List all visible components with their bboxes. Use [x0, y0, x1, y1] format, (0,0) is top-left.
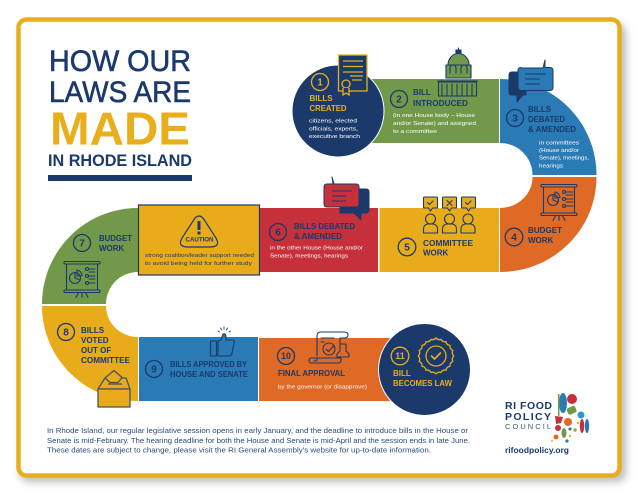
icon: capitol: [438, 48, 478, 96]
caution text: to avoid being held for further study: [145, 261, 252, 267]
icon: caution triangle: CAUTION: [186, 236, 214, 244]
description: [539, 140, 589, 170]
title: [48, 45, 192, 181]
number 1: 1: [317, 78, 323, 88]
number 3: 3: [512, 114, 518, 124]
description: Senate), meetings,: [539, 156, 589, 162]
heading: BILL: [393, 369, 411, 378]
step 2: bill introduced: [370, 48, 499, 143]
step 1: bills created: [292, 55, 384, 157]
number 9: 9: [151, 364, 157, 376]
heading: HOUSE AND SENATE: [170, 370, 249, 379]
icon: ballot box: [98, 370, 130, 407]
description: executive branch: [309, 134, 360, 140]
caution text: strong coalition/leader support needed: [145, 253, 254, 259]
step 4: budget work: [500, 177, 596, 272]
number 11: 11: [395, 351, 405, 361]
heading: OUT OF: [81, 346, 111, 355]
icon: certificate: [338, 55, 367, 95]
title: IN RHODE ISLAND: [48, 152, 192, 170]
heading: WORK: [99, 244, 125, 253]
logo wordmark: COUNCIL: [505, 422, 551, 431]
step 9: bills approved: [139, 327, 258, 401]
title: MADE: [50, 102, 190, 154]
heading: CREATED: [310, 104, 347, 113]
heading: BILLS: [81, 326, 105, 335]
description: and/or Senate) and assigned: [393, 121, 476, 127]
step 6: bills debated and amended: [259, 177, 378, 272]
heading: [528, 105, 576, 134]
description: (House and/or: [539, 148, 579, 154]
heading: BILL: [413, 88, 431, 97]
footer note: These dates are subject to change, please visit the RI General Assembly's website for up-to-date information.: [47, 446, 431, 454]
number 2: 2: [396, 94, 402, 106]
icon: presentation board: [64, 262, 100, 298]
heading: WORK: [528, 236, 554, 245]
logo map of food shapes: [551, 393, 589, 443]
footer note: In Rhode Island, our regular legislative session opens in early January, and the deadline to introduce bills in the House or: [47, 426, 469, 435]
icon: thumbs up: [210, 327, 234, 356]
step 7: budget work: [42, 208, 138, 304]
website: rifoodpolicy.org: [505, 446, 569, 455]
description: [309, 118, 360, 140]
icon: scroll and stamp: [309, 332, 349, 363]
step 8: bills voted out of committee: [42, 306, 138, 407]
icon: three voters: [424, 197, 476, 233]
heading: FINAL APPROVAL: [278, 369, 345, 378]
heading: INTRODUCED: [413, 99, 468, 108]
heading: & AMENDED: [294, 232, 342, 241]
description: Senate), meetings, hearings: [270, 254, 348, 260]
heading: VOTED: [81, 336, 109, 345]
heading: [170, 360, 249, 379]
heading: BUDGET: [528, 226, 562, 235]
description: officials, experts,: [309, 126, 358, 132]
description: hearings: [539, 164, 563, 170]
icon: chat bubbles: [509, 60, 553, 102]
logo wordmark: RI FOOD: [505, 400, 552, 412]
description: by the governor (or disapprove): [278, 384, 367, 390]
description: in the other House (House and/or: [270, 246, 363, 252]
description: [270, 246, 363, 260]
step 10: final approval: [259, 332, 399, 401]
footer note: Senate is mid-February. The hearing deadline for both the House and Senate is mid-April and the session ends in late June.: [47, 436, 470, 445]
description: citizens, elected: [309, 118, 357, 124]
logo wordmark: [505, 400, 552, 431]
heading: [413, 88, 468, 108]
icon: chat bubbles: [324, 177, 369, 220]
description: to a committee: [393, 129, 437, 135]
step 11: bill becomes law: [378, 324, 470, 416]
number 6: 6: [275, 228, 281, 238]
description: (in one House body – House: [393, 113, 475, 119]
number 4: 4: [511, 232, 517, 244]
step 3: bills debated and amended: [500, 60, 596, 175]
footer note: [47, 426, 470, 454]
heading: [99, 234, 132, 253]
caution box: [138, 205, 260, 275]
heading: [294, 222, 355, 241]
heading: [393, 369, 452, 388]
number 7: 7: [79, 238, 85, 250]
title: LAWS ARE: [49, 76, 191, 109]
heading: & AMENDED: [528, 125, 576, 134]
heading: BILLS: [528, 105, 552, 114]
step 5: committee work: [380, 197, 499, 272]
title: HOW OUR: [49, 45, 191, 78]
heading: COMMITTEE: [423, 239, 474, 248]
heading: DEBATED: [528, 115, 565, 124]
heading: [81, 326, 131, 365]
heading: BILLS: [310, 94, 333, 103]
heading: [423, 239, 474, 258]
caution text: [145, 253, 254, 267]
logo wordmark: POLICY: [505, 411, 551, 423]
description: [393, 113, 476, 135]
logo: RI Food Policy Council: [505, 393, 589, 455]
heading: WORK: [423, 248, 449, 258]
heading: BECOMES LAW: [393, 379, 452, 388]
heading: [310, 94, 347, 113]
heading: COMMITTEE: [81, 356, 131, 365]
heading: BILLS DEBATED: [294, 222, 355, 231]
heading: BILLS APPROVED BY: [170, 360, 248, 369]
icon: presentation board: [541, 184, 577, 220]
description: in committees: [539, 140, 579, 146]
number 10: 10: [281, 351, 291, 361]
number 5: 5: [404, 242, 410, 254]
icon: seal: [418, 338, 454, 374]
heading: [528, 226, 562, 245]
heading: BUDGET: [99, 234, 132, 243]
number 8: 8: [63, 328, 69, 338]
